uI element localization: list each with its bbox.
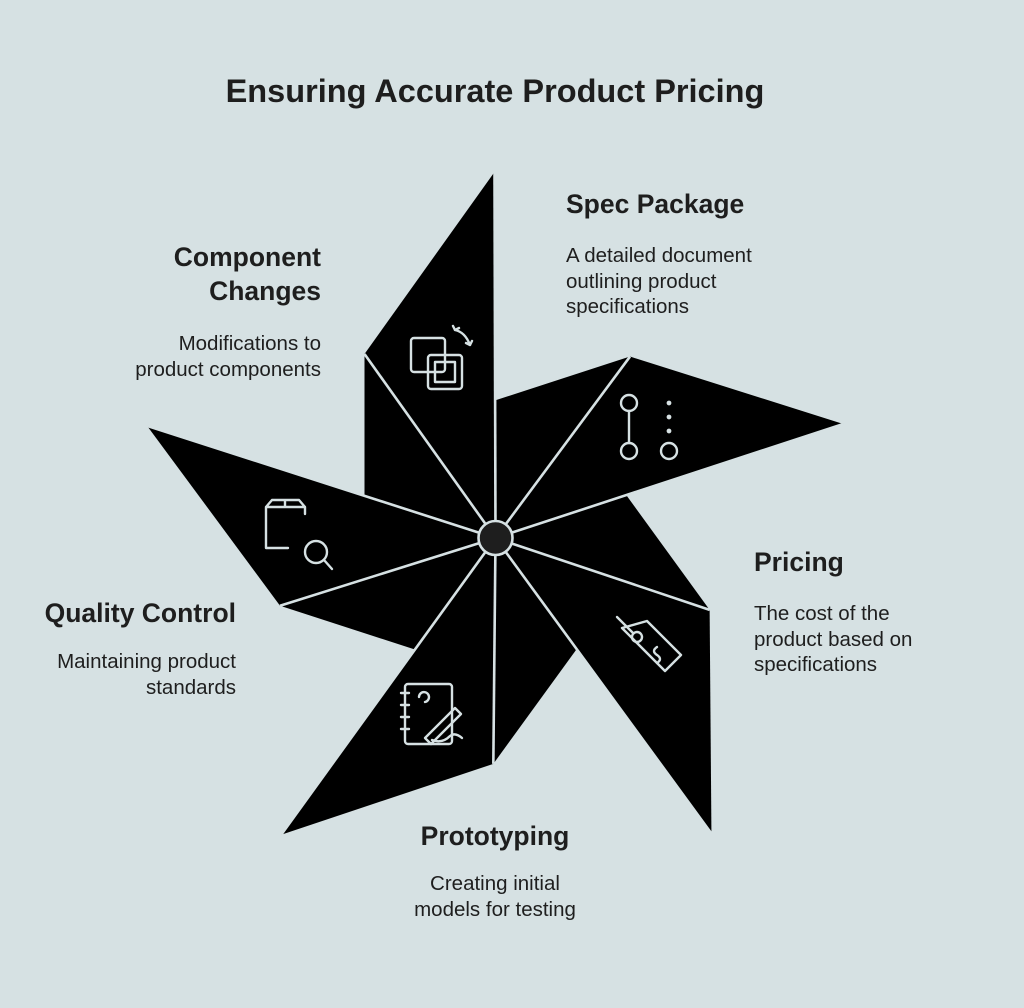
heading: Spec Package: [566, 189, 744, 219]
description: specifications: [754, 653, 877, 676]
description: A detailed document: [566, 244, 752, 267]
blade: pricing: [496, 461, 817, 834]
heading: [174, 242, 321, 306]
description: product components: [135, 358, 321, 380]
description: [135, 332, 321, 380]
description: product based on: [754, 628, 912, 650]
description: models for testing: [414, 898, 576, 920]
text: quality control: [45, 598, 236, 698]
text: component changes: [135, 242, 321, 380]
description: [57, 650, 236, 698]
text: pricing: [754, 547, 912, 676]
description: standards: [146, 676, 236, 698]
blade: prototyping: [280, 538, 601, 911]
icon: price tag: [617, 617, 681, 671]
description: Modifications to: [179, 332, 321, 355]
heading: Prototyping: [421, 821, 569, 851]
text: spec package: [566, 189, 752, 318]
heading: Quality Control: [45, 598, 236, 628]
description: Maintaining product: [57, 650, 236, 673]
title: Ensuring Accurate Product Pricing: [226, 73, 764, 109]
heading: Component: [174, 242, 321, 272]
text: prototyping: [414, 821, 576, 920]
blade: quality control: [107, 425, 496, 663]
description: [566, 244, 752, 318]
heading: Pricing: [754, 547, 844, 577]
description: specifications: [566, 295, 689, 318]
blade: component changes: [364, 172, 496, 538]
description: Creating initial: [430, 872, 560, 895]
center hub: [478, 521, 512, 555]
icon: component swap: [411, 326, 472, 389]
icon: box search: [266, 500, 332, 569]
description: [414, 872, 576, 920]
description: [754, 602, 912, 676]
icon: spec nodes: [621, 395, 677, 459]
description: outlining product: [566, 270, 716, 292]
heading: Changes: [209, 276, 321, 306]
description: The cost of the: [754, 602, 890, 625]
blade: spec package: [455, 300, 844, 538]
icon: prototype notebook: [401, 684, 462, 744]
